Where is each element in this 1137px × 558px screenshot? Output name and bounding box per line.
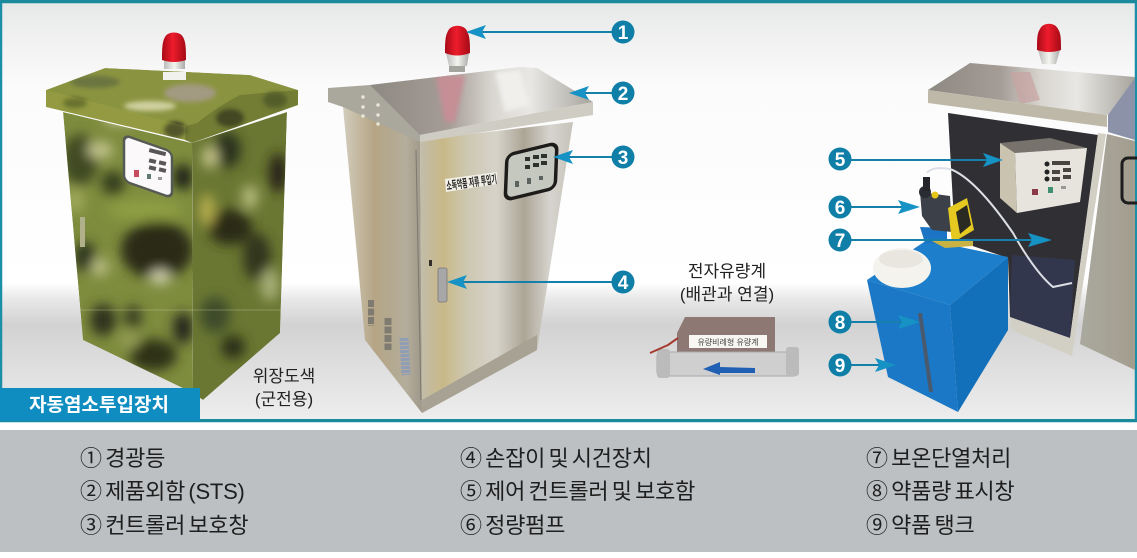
chemical tank [867,240,1008,412]
tubing [927,168,1072,287]
arrow 5 [851,153,1003,167]
badge 5 [828,148,852,171]
callout arrows [447,25,1052,372]
legend item 8: ⑧ 약품량 표시창 [866,479,1014,504]
badge 7: 7 [835,231,845,252]
beacon [445,26,470,72]
arrow 4 [447,275,612,289]
beacon [162,32,186,80]
legend item 7: ⑦ 보온단열처리 [866,446,1011,471]
badge 5: 5 [835,150,846,171]
legend item 6: ⑥ 정량펌프 [460,513,565,538]
badge 2: 2 [618,84,628,105]
roof [928,63,1135,115]
legend item 3: ③ 컨트롤러 보호창 [80,513,248,538]
badge 1 [612,20,634,44]
badge 4: 4 [618,273,629,294]
illustration panel [0,0,1137,422]
lower vents [371,300,388,350]
legend item 2: ② 제품외함 (STS) [80,479,245,504]
door frame [1010,133,1106,356]
badge 2 [612,82,634,105]
vent holes [361,95,380,126]
interior [948,113,1098,338]
tank lid [873,248,931,288]
beacon [1037,24,1061,64]
flow meter [650,317,799,378]
arrow 6 [851,200,920,214]
stainless cabinet [328,26,593,413]
door [1080,134,1135,370]
legend item 9: ⑨ 약품 탱크 [866,513,974,538]
roof camouflage [46,68,298,143]
title tab: 자동염소투입장치 [29,394,169,416]
arrow 2 [569,86,612,100]
legend panel [0,430,1137,552]
roof [328,85,420,142]
left face camouflage [62,112,193,393]
caption: pipe connection: (배관과 연결) [680,285,774,304]
control window [505,143,557,200]
handle [80,217,85,247]
opened cabinet [867,24,1137,412]
badge 9 [828,354,852,377]
flow meter: 유량비례형 유량계 [697,337,759,347]
badge 7 [828,228,852,252]
arrow 7 [851,233,1052,247]
badge 1: 1 [618,23,629,44]
badge 8 [828,310,852,334]
background frame [0,0,1137,423]
control window [124,135,172,198]
cabinet label: 소독약품 저류 투입기 [445,172,498,193]
right face camouflage [192,112,287,400]
badge 3: 3 [618,148,628,169]
legend item 5: ⑤ 제어 컨트롤러 및 보호함 [460,479,695,504]
camouflage cabinet [46,32,298,400]
arrow 8 [851,315,920,329]
arrow 1 [466,25,612,39]
legend item 4: ④ 손잡이 및 시건장치 [460,446,652,471]
badge 8: 8 [835,313,845,334]
door line and handle [416,150,421,400]
caption: flow meter: 전자유량계 [688,262,766,281]
tank window [918,313,933,392]
title tab [0,388,200,421]
arrow 3 [553,150,612,164]
badge 4 [612,270,634,294]
caption: military use: (군전용) [255,390,313,409]
flow arrow [703,362,755,375]
badge 6 [828,196,852,219]
badge 9: 9 [835,356,845,377]
caption: camouflage paint: 위장도색 [253,367,315,386]
controller box [1000,138,1087,213]
badge 3 [612,146,634,169]
legend item 1: ① 경광등 [80,446,165,471]
arrow 9 [851,358,896,372]
pump [919,177,974,248]
badge 6: 6 [835,198,845,219]
number badges [612,20,852,377]
